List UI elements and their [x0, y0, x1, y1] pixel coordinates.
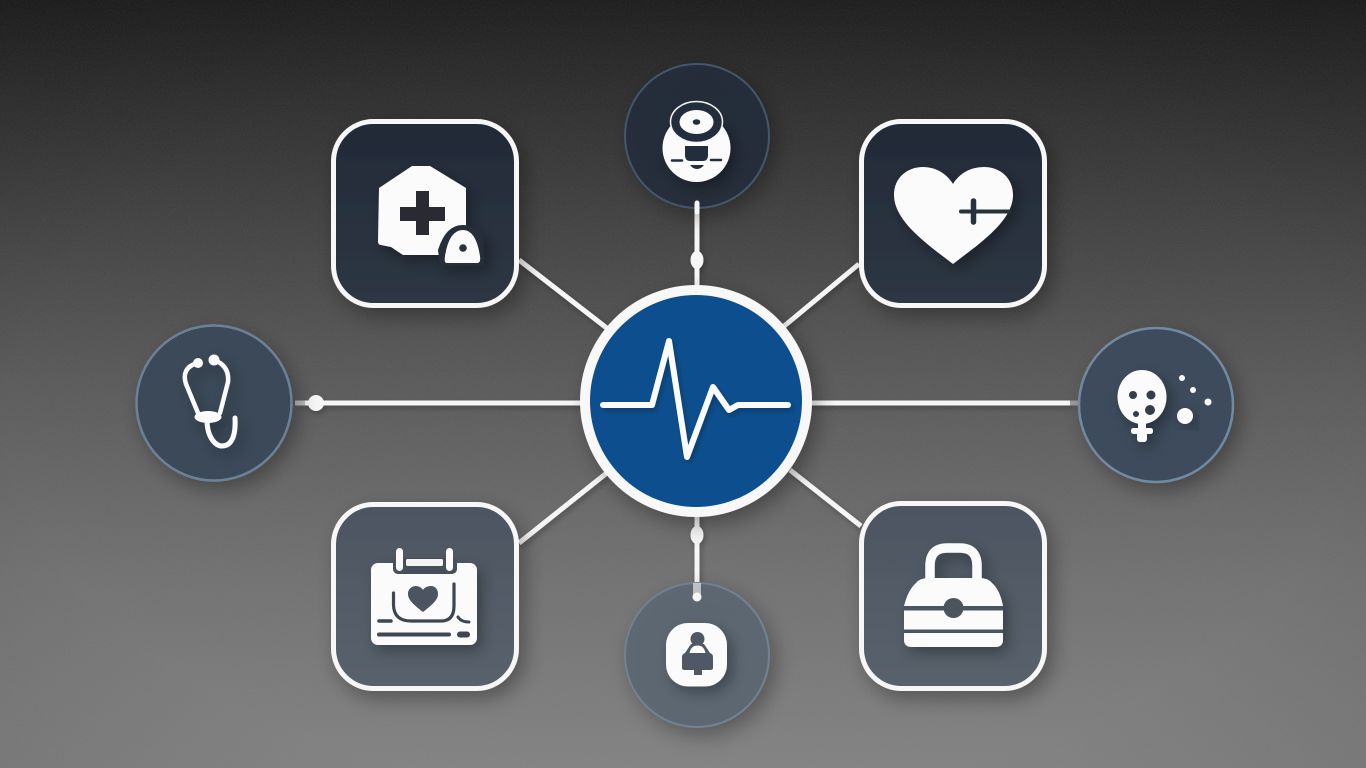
- panel: central hub: [585, 290, 807, 512]
- icon: calendar with heart: [371, 548, 477, 645]
- icon: bulb with dots: [1118, 370, 1212, 442]
- connector tip: [692, 583, 702, 602]
- icon: stethoscope: [185, 354, 235, 446]
- connector lines: [295, 202, 1079, 597]
- connector: top: [690, 202, 704, 290]
- panel: bottom left rounded square: [334, 504, 516, 688]
- panel: top circle: [625, 64, 769, 212]
- connector tip: [694, 203, 700, 212]
- connector: bottom right: [790, 470, 861, 526]
- connector: left: [295, 395, 585, 411]
- icon: examination device: [662, 102, 730, 182]
- icon: padlock: [904, 548, 1003, 647]
- panel: bottom circle: [625, 583, 769, 727]
- connector: top left: [519, 260, 608, 329]
- panel: right circle: [1079, 328, 1233, 482]
- panel: bottom right rounded square: [862, 504, 1044, 688]
- panel: left circle: [136, 326, 292, 480]
- icon: lock badge: [666, 623, 727, 686]
- connector: bottom left: [519, 472, 608, 543]
- connector: top right: [783, 264, 859, 327]
- icon: heart with plus: [894, 167, 1013, 264]
- connector: right: [808, 400, 1079, 406]
- icon: hospital shield with bell: [378, 166, 484, 266]
- icon: heartbeat line: [603, 341, 788, 457]
- panel: top left rounded square: [334, 122, 516, 306]
- connector: bottom: [690, 512, 704, 597]
- panel: top right rounded square: [862, 122, 1044, 306]
